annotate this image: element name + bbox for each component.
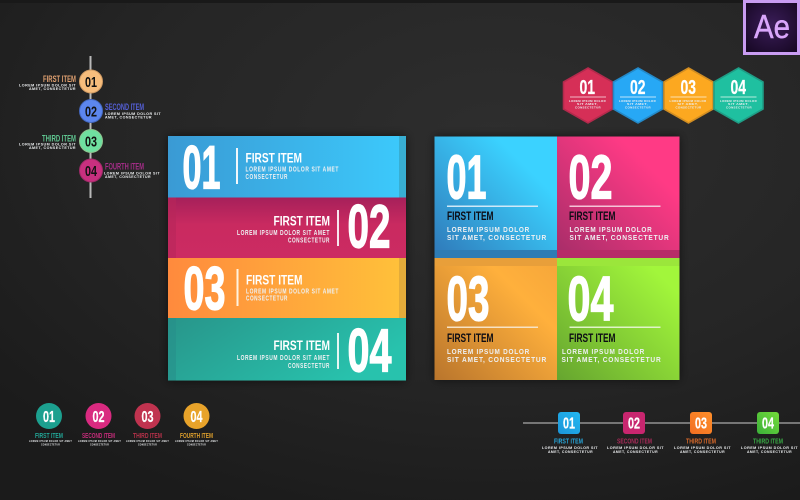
hexagon 4: 04 xyxy=(730,77,747,99)
square badge 1 xyxy=(542,412,599,454)
timeline item 2: LOREM IPSUM DOLOR SIT xyxy=(105,111,161,116)
circle badge 3: 03 xyxy=(142,409,154,426)
band 04: LOREM IPSUM DOLOR SIT AMET xyxy=(237,353,330,362)
square badge 3: THIRD ITEM xyxy=(686,436,716,446)
timeline item 1: AMET, CONSECTETUR xyxy=(29,86,76,91)
circle badge 1: CONSECTETUR xyxy=(41,442,60,446)
hexagon 3: SIT AMET, xyxy=(678,102,698,106)
cell 03: FIRST ITEM xyxy=(447,333,494,345)
cell 01: 01 xyxy=(446,143,486,212)
circle badge 4 xyxy=(175,403,218,446)
cell 04: LOREM IPSUM DOLOR xyxy=(562,347,645,356)
square badge 3: AMET, CONSECTETUR xyxy=(680,450,725,454)
band 01: FIRST ITEM xyxy=(246,150,302,166)
band 04: 04 xyxy=(348,316,392,384)
hexagon 4: LOREM IPSUM DOLOR xyxy=(720,99,757,103)
circle badge 4: FOURTH ITEM xyxy=(180,433,213,440)
square badge 4: THIRD ITEM xyxy=(753,436,783,446)
circle badge 1 xyxy=(29,403,72,446)
timeline item 1: 01 xyxy=(85,74,97,91)
circle badge 3 xyxy=(126,403,169,446)
hexagon 1: SIT AMET, xyxy=(577,102,598,106)
timeline item 2 xyxy=(80,100,161,122)
circle badges row xyxy=(29,403,218,446)
hexagon 4: SIT AMET, xyxy=(728,102,749,106)
cell 01: LOREM IPSUM DOLOR xyxy=(447,225,530,234)
band 01: LOREM IPSUM DOLOR SIT AMET xyxy=(246,164,339,174)
hexagon infographic xyxy=(564,68,763,123)
circle badge 2 xyxy=(78,403,121,446)
square badge 1: FIRST ITEM xyxy=(554,436,583,446)
timeline item 3 xyxy=(19,130,102,152)
hexagon 1: LOREM IPSUM DOLOR xyxy=(569,99,606,103)
circle badge 2: 02 xyxy=(92,409,105,426)
timeline item 4 xyxy=(80,159,160,182)
circle badge 2: CONSECTETUR xyxy=(90,442,109,446)
hexagon 3 xyxy=(664,68,713,123)
square badge 4 xyxy=(741,412,799,454)
timeline item 3: THIRD ITEM xyxy=(42,134,76,144)
timeline item 3: 03 xyxy=(85,134,97,150)
hexagon 1 xyxy=(564,68,612,123)
band 03: CONSECTETUR xyxy=(246,294,288,302)
square badge 3 xyxy=(674,412,732,454)
cell 03: LOREM IPSUM DOLOR xyxy=(447,347,530,356)
band 01: 01 xyxy=(182,133,220,201)
timeline item 1: FIRST ITEM xyxy=(43,74,76,84)
cell 03 xyxy=(434,258,557,380)
square badge 1: AMET, CONSECTETUR xyxy=(548,450,593,454)
timeline item 3: AMET, CONSECTETUR xyxy=(29,145,76,150)
hexagon 2: CONSECTETUR xyxy=(625,106,651,110)
square badge 2: LOREM IPSUM DOLOR SIT xyxy=(607,446,665,450)
cell 02: SIT AMET, CONSECTETUR xyxy=(570,233,670,242)
circle badge 3: LOREM IPSUM DOLOR SIT AMET xyxy=(126,439,169,443)
timeline item 4: AMET, CONSECTETUR xyxy=(105,174,151,179)
square badge 1: LOREM IPSUM DOLOR SIT xyxy=(542,446,599,450)
hexagon 2: SIT AMET, xyxy=(627,102,648,106)
circle badge 4: 04 xyxy=(190,409,203,426)
circle badge 1: LOREM IPSUM DOLOR SIT AMET xyxy=(29,439,72,443)
hexagon 4 xyxy=(714,68,763,123)
band 03: FIRST ITEM xyxy=(246,272,302,288)
band 03 xyxy=(168,254,406,322)
cell 02: FIRST ITEM xyxy=(569,211,616,223)
square badge 4: 04 xyxy=(762,416,774,432)
cell 04: SIT AMET, CONSECTETUR xyxy=(562,355,662,364)
band 01 xyxy=(168,133,406,201)
cell 04: 04 xyxy=(568,264,614,334)
logo: After Effects: Ae xyxy=(754,8,790,45)
circle badge 4: LOREM IPSUM DOLOR SIT AMET xyxy=(175,439,218,443)
band 04: FIRST ITEM xyxy=(274,338,330,353)
hexagon 3: LOREM IPSUM DOLOR xyxy=(670,99,707,103)
square badge 1: 01 xyxy=(563,416,575,432)
circle badge 3: CONSECTETUR xyxy=(138,442,157,446)
square badge 3: LOREM IPSUM DOLOR SIT xyxy=(674,446,732,450)
timeline item 4: 04 xyxy=(85,163,97,180)
cell 02: LOREM IPSUM DOLOR xyxy=(570,225,652,234)
square badge 4: AMET, CONSECTETUR xyxy=(747,450,792,454)
hexagon 3: CONSECTETUR xyxy=(676,106,702,110)
cell 03: SIT AMET, CONSECTETUR xyxy=(447,355,547,364)
cell 01: FIRST ITEM xyxy=(447,211,494,223)
cell 01: SIT AMET, CONSECTETUR xyxy=(447,233,547,242)
hexagon 2 xyxy=(614,68,662,123)
band 04 xyxy=(168,316,406,384)
cell 04: FIRST ITEM xyxy=(569,333,616,345)
horizontal timeline with square badges xyxy=(523,412,800,454)
timeline item 4: FOURTH ITEM xyxy=(105,162,144,172)
square badge 4: LOREM IPSUM DOLOR SIT xyxy=(741,446,799,450)
hexagon 3: 03 xyxy=(680,77,696,99)
band 02 xyxy=(168,192,406,260)
square badge 3: 03 xyxy=(695,416,707,432)
timeline item 1: LOREM IPSUM DOLOR SIT xyxy=(19,82,76,88)
vertical timeline infographic xyxy=(19,56,161,198)
square badge 2: SECOND ITEM xyxy=(617,436,652,446)
square badge 2: 02 xyxy=(628,416,640,432)
band 02: CONSECTETUR xyxy=(288,236,330,244)
square badge 2: AMET, CONSECTETUR xyxy=(613,450,658,454)
timeline item 2: SECOND ITEM xyxy=(105,102,144,112)
hexagon 2: 02 xyxy=(630,77,646,99)
timeline item 2: AMET, CONSECTETUR xyxy=(105,114,152,120)
cell 01 xyxy=(434,136,557,258)
hexagon 2: LOREM IPSUM DOLOR xyxy=(619,99,656,103)
cell 02: 02 xyxy=(568,143,612,212)
band 04: CONSECTETUR xyxy=(288,361,330,370)
cell 04 xyxy=(557,258,680,380)
logo: After Effects xyxy=(744,2,798,54)
circle badge 1: 01 xyxy=(43,409,55,426)
cell 02 xyxy=(557,136,680,258)
square badge 2 xyxy=(607,412,665,454)
hexagon 1: CONSECTETUR xyxy=(575,106,601,110)
circle badge 2: SECOND ITEM xyxy=(82,433,115,440)
circle badge 3: THIRD ITEM xyxy=(133,433,162,440)
band 02: LOREM IPSUM DOLOR SIT AMET xyxy=(237,228,330,237)
band 03: LOREM IPSUM DOLOR SIT AMET xyxy=(246,286,339,296)
hexagon 4: CONSECTETUR xyxy=(726,106,752,110)
panel: horizontal bands xyxy=(168,133,406,384)
hexagon 1: 01 xyxy=(580,77,595,99)
circle badge 4: CONSECTETUR xyxy=(187,442,206,446)
timeline item 3: LOREM IPSUM DOLOR SIT xyxy=(19,142,76,146)
band 02: FIRST ITEM xyxy=(274,214,330,228)
band 02: 02 xyxy=(348,192,390,260)
timeline item 4: LOREM IPSUM DOLOR SIT xyxy=(104,170,160,176)
timeline item 1 xyxy=(19,70,102,93)
band 03: 03 xyxy=(184,254,226,322)
circle badge 1: FIRST ITEM xyxy=(35,433,63,440)
circle badge 2: LOREM IPSUM DOLOR SIT AMET xyxy=(78,439,121,443)
timeline item 2: 02 xyxy=(85,104,97,120)
band 01: CONSECTETUR xyxy=(246,172,288,181)
panel: four-cell grid xyxy=(434,136,680,380)
cell 03: 03 xyxy=(446,264,490,334)
